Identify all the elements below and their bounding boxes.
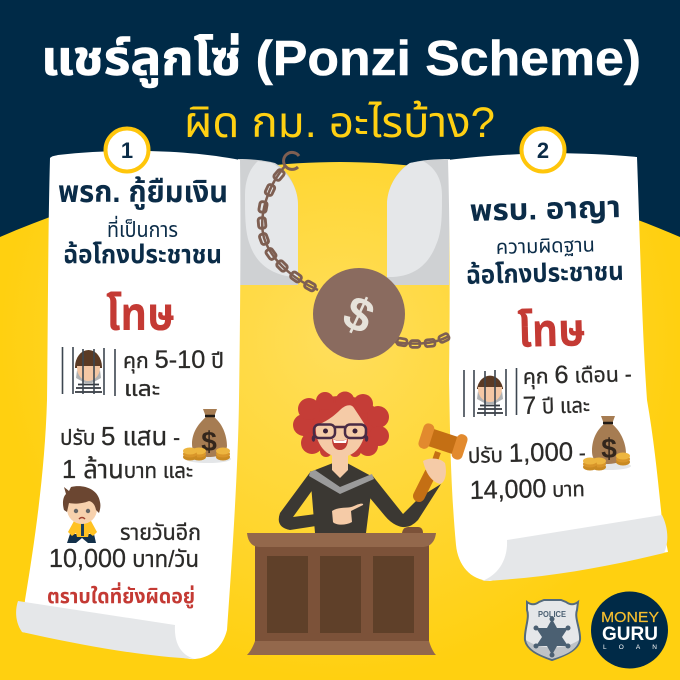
icon: wrecking ball with dollar sign [313, 268, 405, 360]
chain: left [258, 152, 318, 292]
judge hair [293, 392, 389, 457]
left scroll bottom curl [16, 601, 195, 659]
right scroll top curl [387, 159, 450, 285]
subheading: ความผิดฐาน [496, 234, 595, 259]
judge gavel hand [423, 459, 446, 484]
icon: wrecking ball with dollar sign: $ [335, 286, 382, 345]
penalty heading: โทษ [517, 303, 586, 357]
jail term: คุก 5-10 ปี [123, 346, 224, 374]
subtitle: ผิด กม. อะไรบ้าง? [184, 99, 495, 147]
and: และ [124, 378, 160, 401]
daily fine label: รายวันอีก [120, 520, 201, 545]
gavel [417, 422, 469, 496]
icon: money bag left [183, 409, 231, 463]
chain: right [395, 333, 450, 347]
panel: left scroll [16, 151, 298, 659]
right scroll paper [448, 153, 668, 581]
subheading: ที่เป็นการ [107, 215, 178, 242]
badge: number 2: 2 [537, 138, 549, 163]
icon: prisoner right [464, 368, 516, 417]
heading: act name: พรบ. อาญา [469, 191, 621, 228]
daily fine amount: 10,000 บาท/วัน [49, 543, 199, 573]
fine line 2: 14,000 บาท [469, 472, 585, 505]
left scroll text [47, 176, 228, 608]
judge collar [309, 470, 374, 494]
judge neck [332, 450, 348, 478]
judge pointing hand [332, 504, 363, 525]
judge desk [247, 527, 436, 655]
badge: number 2 [522, 128, 564, 172]
icon: money bag left: $ [201, 426, 217, 457]
fine line 2: 1 ล้านบาท และ [62, 454, 193, 484]
panel: right scroll [387, 153, 668, 581]
fine line 1: ปรับ 5 แสน - [60, 421, 180, 451]
icon: money bag right: $ [601, 433, 617, 464]
fine line 1: ปรับ 1,000 - [467, 436, 586, 469]
logo: Money Guru Loan: LOAN [603, 644, 657, 651]
judge illustration [279, 392, 469, 533]
logo: Money Guru Loan [591, 592, 668, 668]
heading: act name: พรก. กู้ยืมเงิน [58, 176, 228, 210]
judge earrings [312, 435, 368, 442]
jail term line 1: คุก 6 เดือน - [522, 359, 632, 390]
left scroll top curl [238, 159, 298, 285]
jail term line 2: 7 ปี และ [522, 390, 590, 420]
right scroll bottom curl [482, 515, 667, 581]
logo: Money Guru Loan: GURU [602, 623, 658, 645]
red note: ตราบใดที่ยังผิดอยู่ [47, 582, 195, 608]
right scroll text [465, 191, 632, 505]
icon: police badge: POLICE [538, 610, 567, 619]
left scroll paper [22, 151, 240, 659]
judge face [316, 405, 365, 457]
judge right arm [365, 475, 441, 527]
logo: Money Guru Loan: MONEY [601, 609, 659, 626]
judge smile [332, 439, 348, 450]
icon: sad boy [63, 486, 100, 543]
judge torso [310, 463, 373, 533]
badge: number 1 [106, 128, 148, 172]
heading: offence: ฉ้อโกงประชาชน [465, 256, 624, 290]
title: แชร์ลูกโซ่ (Ponzi Scheme) [41, 32, 641, 88]
badge: number 1: 1 [121, 138, 133, 163]
judge glasses [314, 424, 366, 438]
icon: police badge [525, 600, 580, 660]
icon: prisoner left [62, 347, 115, 396]
heading: offence: ฉ้อโกงประชาชน [63, 239, 222, 269]
penalty heading: โทษ [106, 288, 175, 340]
icon: money bag right [583, 416, 631, 470]
judge left arm [279, 471, 316, 530]
